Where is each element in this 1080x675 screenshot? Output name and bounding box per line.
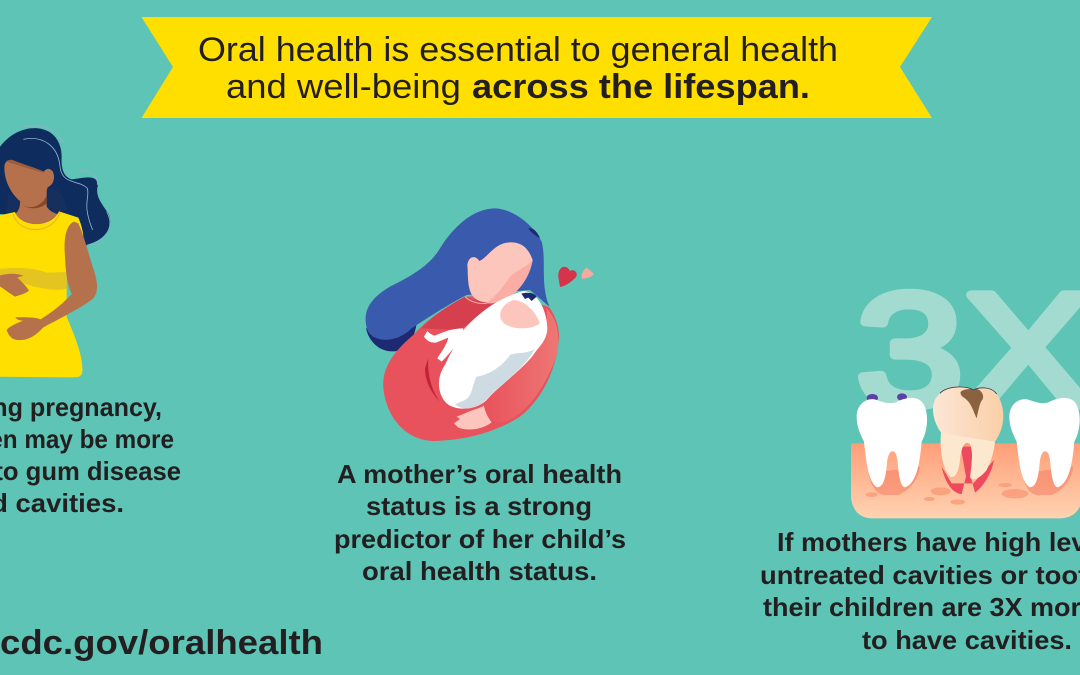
crown outline: [940, 387, 997, 394]
website url: cdc.gov/oralhealth: [0, 624, 323, 662]
hair shadow: [7, 188, 67, 214]
inflamed gum around decayed tooth: [942, 447, 994, 494]
left healthy tooth: [857, 398, 927, 487]
large heart: [558, 267, 577, 287]
big 3X figure: 3X: [856, 260, 1080, 439]
upper hand: [0, 274, 29, 297]
banner ribbon: [142, 17, 932, 118]
gum: [851, 443, 1080, 518]
decayed tooth crown: [933, 386, 1003, 442]
decayed tooth root: [941, 427, 995, 479]
hairline shadow: [7, 160, 44, 173]
baby face: [500, 300, 540, 328]
hair shadow: [528, 228, 540, 238]
small heart: [582, 268, 594, 279]
hearts: [558, 267, 594, 287]
purple plaque: [867, 394, 878, 402]
banner heading: and well-being: [226, 68, 471, 106]
gum spots: [866, 483, 1028, 505]
body: [383, 295, 559, 441]
banner: [142, 17, 932, 118]
blanket shadow: [455, 349, 535, 408]
hair: [366, 208, 549, 340]
mother's other arm fold: [425, 358, 440, 402]
illustration: mother holding baby: [366, 208, 559, 441]
root pockets: [868, 467, 1073, 495]
neck: [15, 190, 57, 224]
banner heading: Oral health is essential to general health: [198, 31, 838, 69]
chin shadow: [22, 196, 47, 208]
mother's status text: predictor of her child’s: [334, 524, 626, 554]
face: [4, 160, 54, 206]
dress: [0, 211, 83, 377]
mother's status text: A mother’s oral health: [337, 459, 622, 489]
arm and lower hand: [7, 222, 97, 340]
mothers and children text: to have cavities.: [862, 625, 1072, 655]
illustration: pregnant woman: [0, 126, 110, 377]
mothers and children text: [760, 527, 1080, 655]
dress collar: [13, 212, 60, 230]
blanket tail: [424, 328, 463, 362]
mother's status text: [334, 459, 626, 586]
face: [467, 242, 533, 303]
collar line: [465, 297, 487, 304]
decay cavity: [961, 389, 983, 418]
mother's hand: [454, 406, 492, 429]
right healthy tooth: [1009, 398, 1080, 487]
baby hair: [521, 293, 537, 301]
dress band: [0, 268, 67, 290]
mother's status text: status is a strong: [366, 491, 592, 521]
face shadow: [487, 260, 533, 303]
hair underside: [366, 323, 417, 351]
pregnancy text: [0, 392, 181, 518]
hair: [0, 128, 110, 246]
illustration: teeth in gum: [851, 386, 1080, 518]
chest shading: [422, 297, 493, 330]
baby blanket: [439, 291, 547, 409]
mother's status text: oral health status.: [362, 556, 597, 586]
banner heading: across the lifespan.: [472, 68, 810, 106]
mother's arm: [485, 308, 558, 423]
hair highlight: [23, 126, 110, 245]
